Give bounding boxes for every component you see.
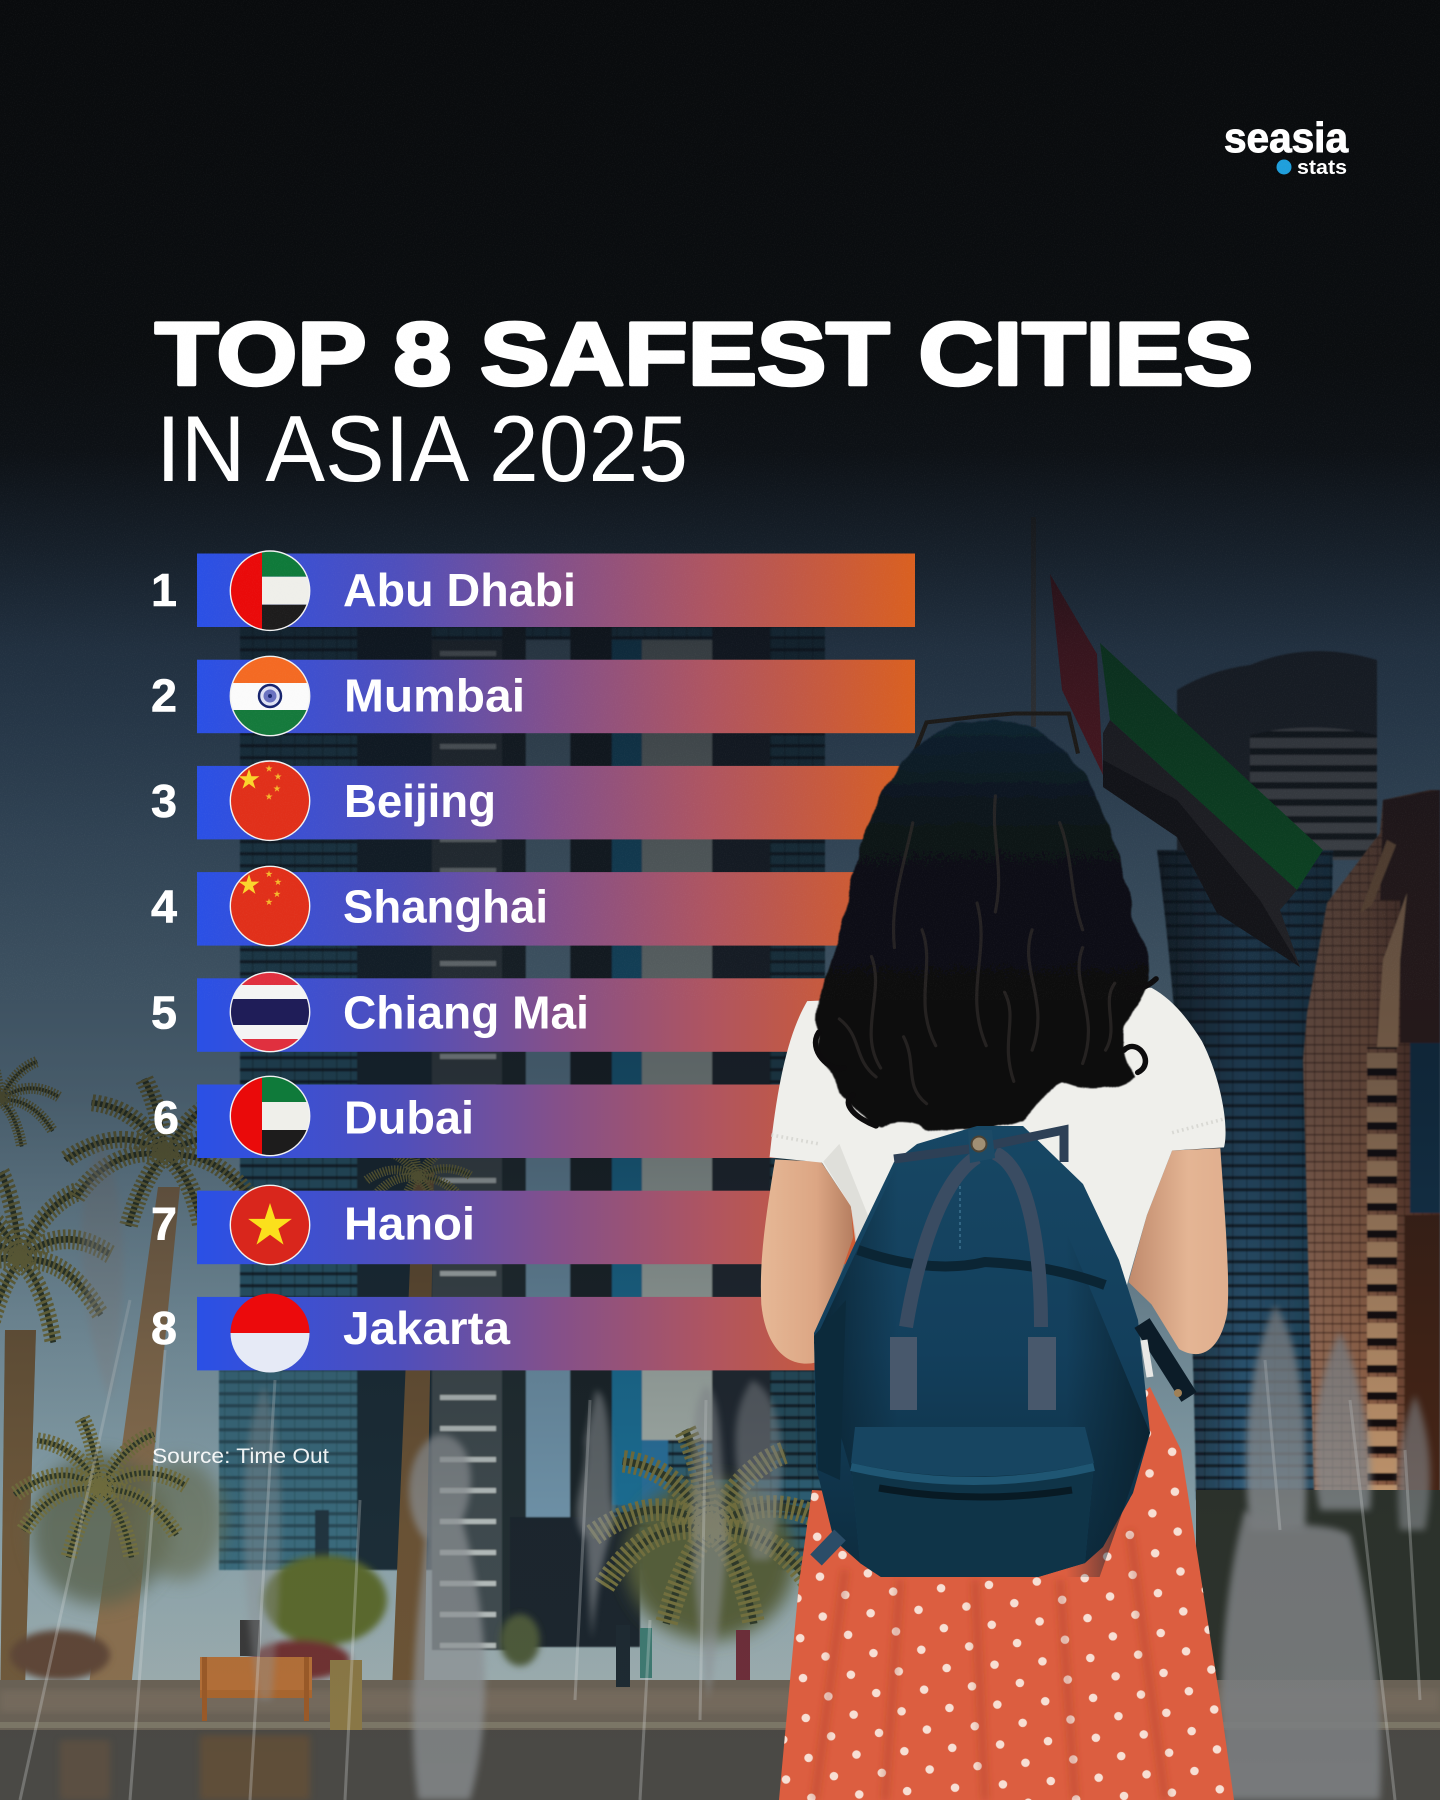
seasia stats logo: stats [1297, 157, 1347, 179]
row 4: Shanghai [151, 866, 915, 946]
front pocket [851, 1427, 1094, 1577]
flag pole and UAE flag [1031, 517, 1323, 967]
seasia stats logo: seasia [1224, 114, 1349, 161]
row 7: Hanoi [151, 1185, 915, 1265]
row 2: Mumbai: 2 [151, 670, 177, 722]
logo globe [1276, 160, 1292, 174]
row 2: Mumbai: Mumbai [344, 670, 525, 722]
row 3: Beijing: Beijing [344, 775, 496, 827]
handle tabs [890, 1337, 917, 1410]
row 1: Abu Dhabi [151, 551, 915, 631]
right brown tower [1303, 790, 1440, 1530]
promenade and reflecting pool [0, 1680, 1440, 1800]
side strap [1142, 1323, 1189, 1397]
row 5: Chiang Mai: 5 [151, 986, 177, 1038]
ranking list [151, 551, 915, 1373]
woman with backpack [761, 713, 1234, 1800]
top flap seam [858, 1250, 1105, 1285]
right cylinder tower [1157, 651, 1377, 1500]
central towers [219, 620, 825, 1650]
thin water jets [20, 1300, 1420, 1800]
flag: Indonesia [230, 1293, 310, 1373]
title: TOP 8 SAFEST CITIES [155, 304, 1253, 404]
row 8: Jakarta [152, 1294, 815, 1372]
carry handles [906, 1153, 1041, 1327]
film grain [0, 0, 1440, 1000]
title [155, 304, 1253, 501]
flag: Thailand [230, 972, 310, 1052]
row 5: Chiang Mai: Chiang Mai [343, 986, 589, 1038]
row 3: Beijing: 3 [151, 775, 177, 827]
row 8: Jakarta: Jakarta [343, 1302, 510, 1354]
row 2: Mumbai [151, 656, 915, 736]
row 1: Abu Dhabi: 1 [151, 564, 177, 616]
row 6: Dubai: 6 [153, 1092, 179, 1144]
row 1: Abu Dhabi: Abu Dhabi [343, 564, 576, 616]
flag: India [230, 656, 310, 736]
top strap and snap [894, 1130, 1064, 1162]
blue backpack [814, 1126, 1189, 1577]
source note: Source: Time Out [152, 1445, 329, 1468]
row 6: Dubai: Dubai [344, 1092, 474, 1144]
row 8: Jakarta: 8 [151, 1302, 177, 1354]
row 4: Shanghai: 4 [151, 880, 177, 932]
wooden bench [200, 1657, 362, 1730]
row 4: Shanghai: Shanghai [343, 880, 548, 932]
sunglasses on head [915, 713, 1078, 754]
row 3: Beijing [151, 761, 915, 841]
water fountains [82, 1143, 1430, 1800]
side pocket [814, 1300, 846, 1480]
greenery and flowers [10, 1555, 540, 1680]
pedestrians [240, 1620, 750, 1687]
arms [761, 1148, 1228, 1364]
polka dot skirt [779, 1387, 1234, 1800]
row 7: Hanoi: Hanoi [344, 1198, 475, 1250]
row 5: Chiang Mai [152, 972, 826, 1052]
dark foliage behind right fountains [1196, 1490, 1440, 1700]
palm trees [0, 1050, 829, 1720]
row 6: Dubai [153, 1076, 915, 1158]
subtitle: IN ASIA 2025 [156, 396, 688, 501]
black curly hair [816, 718, 1156, 1131]
row 7: Hanoi: 7 [151, 1198, 177, 1250]
white shirt [770, 988, 1226, 1295]
flag: Vietnam [230, 1185, 310, 1265]
